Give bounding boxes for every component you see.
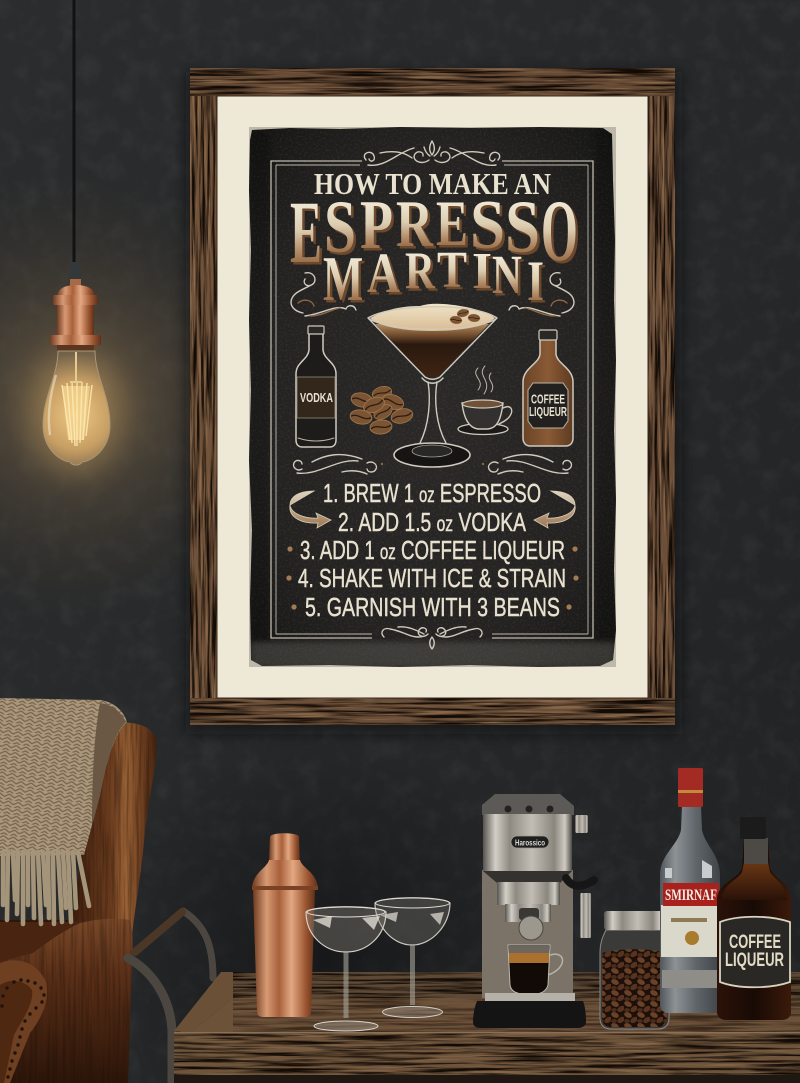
coupe glass, right	[375, 898, 450, 1018]
blanket body	[0, 698, 127, 856]
stem	[420, 382, 446, 443]
collar	[483, 871, 572, 883]
leather armchair	[0, 720, 160, 1083]
bulb glow	[30, 355, 122, 475]
step 1: 1. BREW 1 oz ESPRESSO	[323, 478, 541, 508]
tufted seat back	[0, 922, 80, 965]
saucer	[458, 424, 508, 434]
copper cocktail shaker	[252, 833, 318, 1017]
illustration: coffee cup with steam	[458, 366, 512, 434]
brand badge: Harossico	[515, 838, 545, 848]
vodka bottle	[660, 768, 720, 1013]
studs	[0, 978, 46, 1079]
tray floor	[190, 998, 800, 1033]
foam	[370, 304, 495, 331]
wooden bar tray	[174, 972, 800, 1083]
vodka label text: VODKA	[300, 390, 333, 405]
cream mat board	[217, 96, 648, 698]
glass outline	[368, 307, 497, 383]
coffee beans on foam	[449, 308, 480, 325]
machine top cap	[482, 794, 574, 815]
martini liquid	[375, 324, 489, 377]
steam wand	[566, 878, 594, 938]
distressed paper edge	[249, 127, 616, 667]
glass bulb	[43, 351, 110, 465]
title: how to make an: HOW TO MAKE AN	[314, 166, 551, 201]
left curved arrow	[290, 491, 331, 528]
coffee liqueur bottle	[717, 817, 791, 1020]
red brand band: SMIRNAF	[665, 887, 717, 904]
chalkboard poster	[248, 126, 617, 668]
coupe glass, left	[306, 907, 386, 1031]
step 5: 5. GARNISH WITH 3 BEANS	[305, 592, 560, 622]
amber shoulder	[722, 862, 787, 900]
title: martini: I	[472, 243, 492, 300]
tray front board	[174, 1032, 800, 1075]
drip tray	[485, 993, 575, 1002]
lower label	[662, 970, 719, 988]
cup	[462, 403, 503, 429]
title: martini: I	[527, 249, 544, 314]
tray left side	[174, 972, 233, 1033]
jar glass	[600, 930, 669, 1029]
black cap	[740, 817, 766, 839]
shaker body	[253, 890, 315, 1017]
chair arm	[0, 915, 135, 1083]
ornament: bottom flourish	[382, 627, 482, 649]
step 3: 3. ADD 1 oz COFFEE LIQUEUR	[300, 535, 565, 565]
liqueur label text: COFFEE	[531, 392, 565, 406]
steam	[476, 366, 493, 394]
title: espresso: E	[436, 188, 468, 260]
title: espresso: S	[505, 186, 540, 269]
illustration: vodka bottle	[296, 326, 336, 447]
illustration: coffee liqueur bottle	[523, 330, 573, 446]
liqueur label text: LIQUEUR	[529, 404, 567, 419]
title: martini: A	[367, 242, 400, 305]
upper neck glass	[744, 838, 768, 864]
arm roll	[0, 960, 47, 1083]
espresso cup	[508, 945, 562, 994]
wooden grip	[135, 912, 182, 952]
brand badge	[511, 836, 549, 848]
red cap	[678, 768, 703, 807]
steel head cylinder	[483, 814, 572, 872]
lamp cord	[72, 0, 76, 264]
shaker dome	[252, 860, 318, 887]
copper socket	[50, 262, 101, 351]
ornament: title side flourishes	[291, 273, 574, 316]
pendant lamp with Edison bulb	[30, 0, 122, 475]
bullet dots	[286, 546, 579, 610]
foot	[394, 443, 470, 467]
label emblem	[685, 931, 699, 945]
frame rail: top	[190, 68, 675, 96]
bar cart handle	[128, 911, 213, 1083]
machine back panel	[482, 870, 573, 998]
step 2: 2. ADD 1.5 oz VODKA	[338, 507, 526, 537]
recipe steps	[298, 478, 566, 622]
bottle glass	[717, 838, 791, 1020]
title: espresso: S	[324, 185, 356, 269]
dark label	[720, 917, 790, 987]
title: espresso: R	[396, 187, 434, 261]
tray back rim	[228, 972, 800, 999]
title: espresso	[290, 182, 578, 282]
frame shadow	[186, 72, 682, 734]
title: espresso: O	[541, 183, 578, 280]
bottle glass	[660, 806, 720, 1013]
title: martini: M	[323, 244, 363, 314]
illustration: martini glass	[368, 304, 497, 467]
chair body base	[0, 920, 128, 1083]
step 4: 4. SHAKE WITH ICE & STRAIN	[298, 563, 566, 593]
title: espresso: E	[290, 182, 322, 282]
title: martini	[323, 242, 544, 314]
white label	[661, 905, 719, 957]
wooden picture frame	[186, 68, 682, 734]
beans in jar	[602, 949, 667, 1027]
glass jar of coffee beans	[600, 911, 669, 1029]
black base	[473, 1001, 586, 1028]
illustration: coffee beans	[349, 384, 414, 435]
jar lid	[604, 911, 665, 930]
ornament: top flourish	[364, 141, 500, 165]
title: martini: T	[437, 242, 467, 299]
title: martini: N	[492, 246, 522, 305]
title: espresso: S	[470, 187, 505, 264]
curved metal handle	[128, 958, 172, 1083]
brew group	[497, 882, 560, 905]
portafilter	[519, 908, 543, 940]
cart shelf below tray	[174, 1075, 800, 1083]
side knob	[575, 815, 588, 833]
shaker cap	[269, 833, 300, 862]
blanket fringe	[3, 852, 89, 924]
title: espresso: P	[360, 187, 393, 264]
frame rail: right	[648, 96, 675, 698]
red brand band	[663, 883, 719, 906]
frame rail: left	[190, 96, 217, 698]
chalkboard surface	[248, 126, 617, 668]
chair wing back	[70, 720, 160, 936]
title: martini: R	[405, 242, 436, 300]
chalk double border	[271, 161, 593, 638]
herringbone throw blanket	[0, 698, 127, 924]
espresso machine	[473, 794, 594, 1028]
right curved arrow	[534, 491, 575, 528]
ornament: divider flourishes	[294, 455, 571, 474]
frame rail: bottom	[190, 698, 675, 725]
